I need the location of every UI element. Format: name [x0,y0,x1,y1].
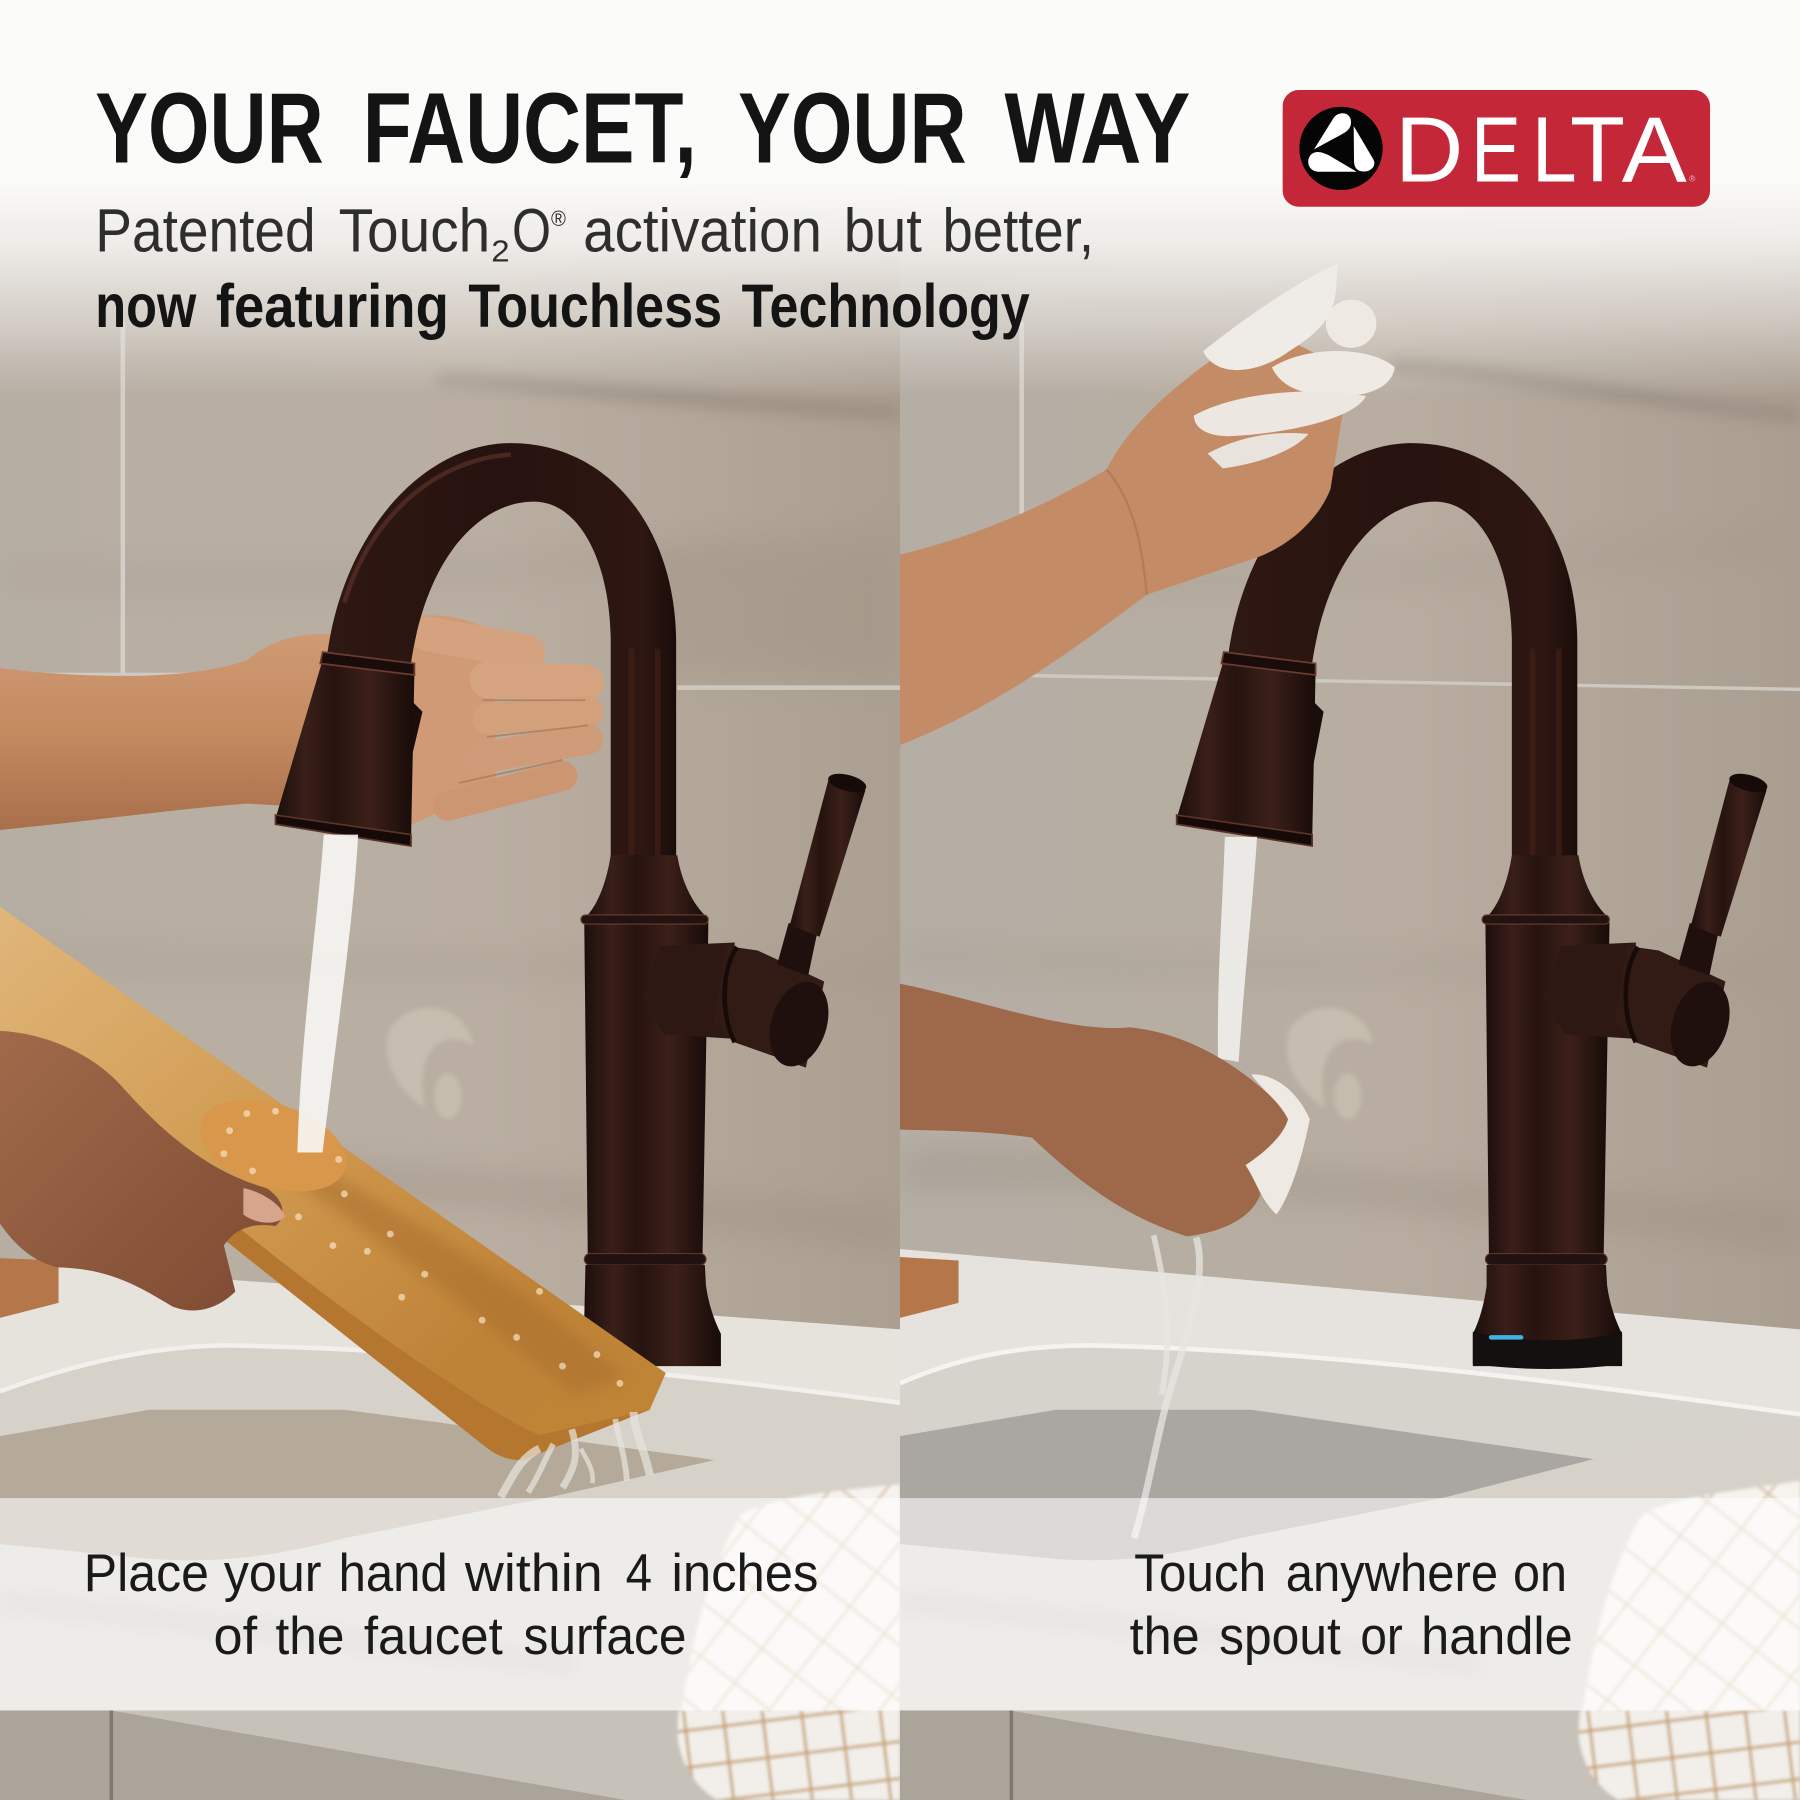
caption right: the [1130,1607,1200,1666]
falling water [1134,1235,1200,1538]
caption right: or [1360,1607,1403,1666]
hand holding board [0,1031,283,1310]
title: WAY [1004,73,1190,184]
caption band [0,1498,900,1710]
sprayer head [1177,652,1324,846]
spout [327,443,676,861]
title [95,73,1190,184]
subtitle line one: 2 [491,234,510,269]
faucet body [581,855,721,1366]
water stream [297,835,358,1153]
caption right: anywhere [1286,1544,1498,1603]
counter and sink [900,1249,1800,1800]
faucet [1177,443,1769,1369]
subtitle line one [95,196,1094,269]
logo wordmark: L [1532,98,1577,202]
panel: left photo, hand near faucet [0,243,900,1800]
subtitle line one: ® [551,206,566,231]
towel [677,1484,900,1800]
towel [1578,1481,1800,1800]
title: YOUR [738,73,967,184]
sprayer head [276,652,422,846]
handle [660,774,866,1068]
caption left: surface [523,1607,686,1666]
subtitle line one: Touch [339,196,490,264]
logo wordmark: D [1395,98,1463,202]
spout [1228,443,1577,861]
caption left: inches [672,1544,818,1603]
caption left: the [276,1607,344,1666]
caption left: your [224,1544,321,1603]
cutting block [0,1258,59,1318]
title: YOUR [95,73,324,184]
logo wordmark: A [1622,98,1687,202]
lower hand with foam [900,984,1310,1236]
title: FAUCET, [363,73,697,184]
cutting board [0,907,666,1460]
water stream [1218,837,1257,1062]
subtitle line two: Touchless [468,272,722,340]
caption left: hand [339,1544,448,1603]
panel: right photo, touching faucet [900,243,1800,1800]
caption right: spout [1219,1607,1341,1666]
handle [1562,774,1768,1068]
caption left: within [464,1544,603,1603]
caption right: on [1513,1544,1567,1603]
cutting block [900,1257,959,1318]
top white fade [0,0,1800,396]
caption right: handle [1421,1607,1573,1666]
faucet [276,443,868,1366]
water beads [220,1108,623,1387]
subtitle line one: but [844,196,922,264]
caption left: faucet [364,1607,503,1666]
caption right: Touch [1134,1544,1266,1603]
fingernail [243,1188,285,1223]
subtitle line two: Technology [742,272,1030,340]
subtitle line two: featuring [216,272,449,340]
subtitle line two: now [95,272,197,340]
upper hand with foam [900,264,1395,745]
subtitle line one: Patented [95,196,316,264]
splash [501,1412,650,1497]
logo wordmark: E [1471,98,1521,202]
caption left: Place [84,1544,209,1603]
wall tile [0,243,900,1330]
subtitle line one: O [512,196,551,264]
caption left: of [214,1607,257,1666]
caption band [900,1498,1800,1710]
caption left: 4 [626,1544,652,1603]
logo mark [1299,107,1383,190]
wall tile [900,243,1800,1330]
subtitle line two [95,272,1030,340]
hand near sprayer [0,615,588,830]
registered mark: ® [1689,173,1696,183]
logo wordmark [1395,98,1687,202]
counter and sink [0,1263,900,1800]
indicator light [1489,1335,1523,1340]
faucet body [1473,855,1622,1369]
caption right [1130,1544,1573,1666]
caption left [84,1544,818,1666]
subtitle line one: activation [583,196,822,264]
logo wordmark: T [1570,98,1625,202]
subtitle line one: better, [942,196,1094,264]
logo: Delta [1283,90,1710,207]
